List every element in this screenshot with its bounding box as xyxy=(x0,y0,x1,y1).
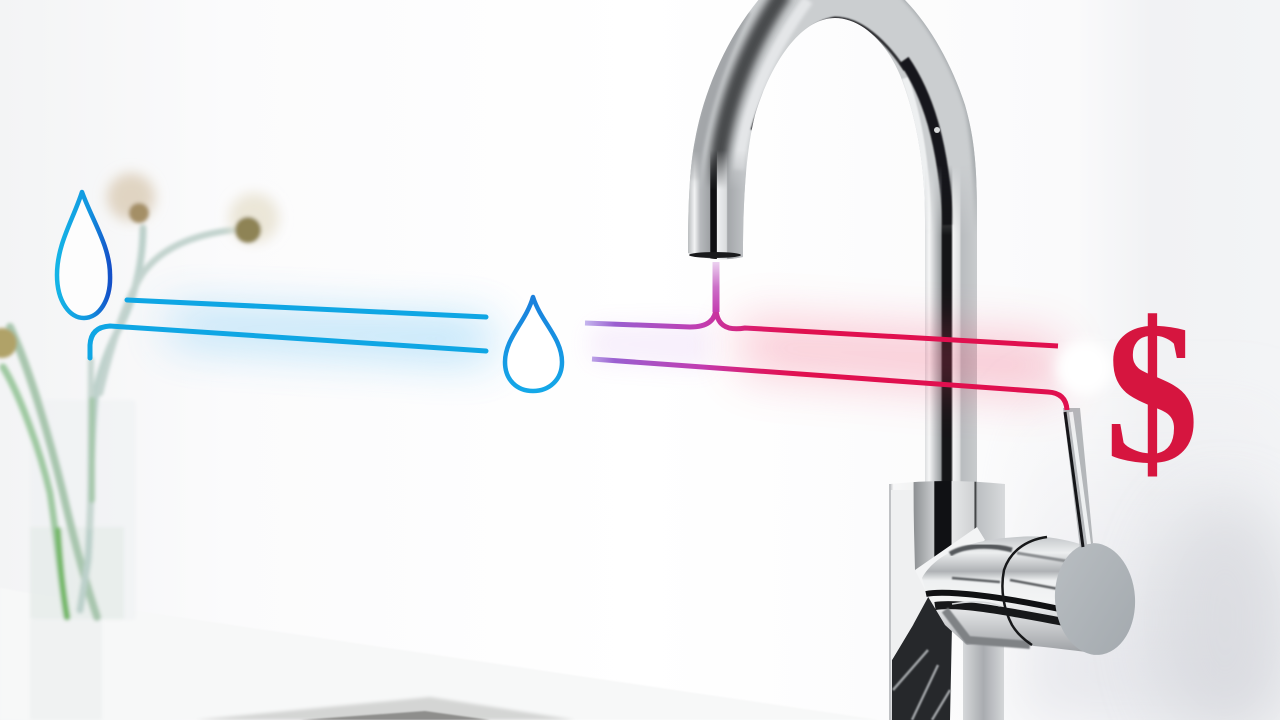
lower dark body xyxy=(892,592,952,720)
water stream line from spout xyxy=(712,262,720,312)
blue glow xyxy=(170,312,490,358)
blurred vase with flowers xyxy=(0,173,279,720)
handle shadow on wall xyxy=(1155,500,1280,720)
faucet base column xyxy=(890,481,1005,720)
icon: centre water drop xyxy=(505,297,562,391)
right pipe below handle xyxy=(963,630,1004,720)
white flare near dollar xyxy=(1056,340,1112,396)
blue water lines xyxy=(90,300,486,358)
wall shade lower right xyxy=(1020,380,1280,720)
red glow xyxy=(740,318,1060,398)
icon: dollar sign: $ xyxy=(1105,280,1199,506)
left white junction xyxy=(890,490,932,720)
spout opening xyxy=(689,252,741,258)
collar diagonal reflection xyxy=(915,527,985,590)
handle end cap xyxy=(1051,540,1139,658)
column left edge xyxy=(889,484,891,720)
purple glow xyxy=(590,322,710,370)
faucet xyxy=(680,0,1139,720)
icon: left water drop xyxy=(57,192,110,318)
counter top xyxy=(0,588,880,720)
lever dark line xyxy=(1065,412,1083,547)
lower body highlights xyxy=(893,650,950,720)
pink and purple cost lines xyxy=(585,307,1067,410)
gooseneck spout tube xyxy=(680,0,980,495)
lever xyxy=(1063,408,1093,548)
handle reflections xyxy=(926,546,1072,645)
handle ring xyxy=(1002,537,1047,645)
handle cylinder xyxy=(922,536,1095,653)
lever highlight xyxy=(1071,412,1089,544)
